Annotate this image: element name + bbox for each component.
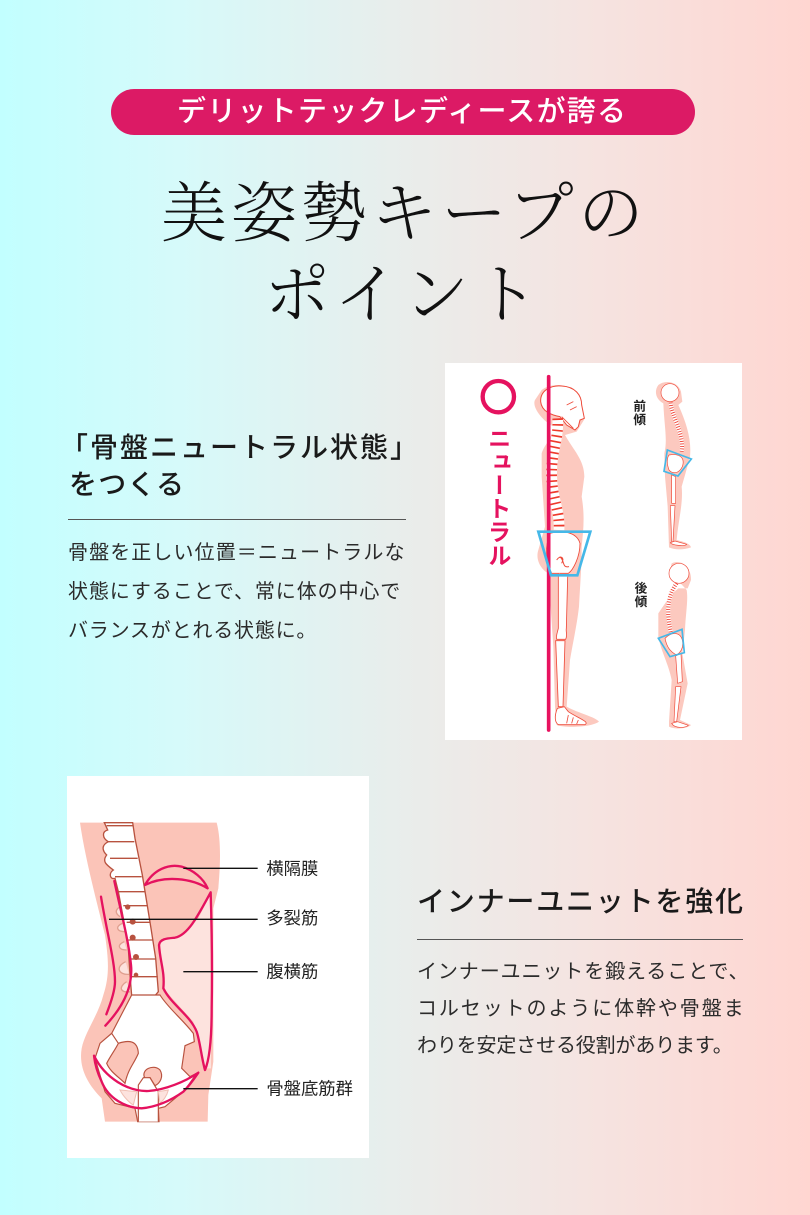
label: posterior tilt: 後 [635,581,648,596]
label: neutral vertical: ニュートラル [485,427,511,567]
pelvis [95,995,197,1122]
title line 2: ポイント [264,259,543,332]
section 2 text [417,886,749,1057]
section 1 body: バランスがとれる状態に。 [68,620,317,642]
banner pill [111,89,695,135]
figure: posterior tilt [658,562,691,728]
pelvis trapezoid [538,532,590,575]
section 2 heading: インナーユニットを強化 [417,886,745,917]
spine [103,823,158,996]
panel: posture diagram [445,363,742,740]
section 1 text [60,432,420,642]
section 1 heading [60,432,420,500]
abdomen fill [160,895,211,1068]
labels: 横隔膜 [266,859,318,879]
figure: neutral skeleton [534,377,599,730]
banner text: デリットテックレディースが誇る [177,96,627,128]
section 2 body [417,961,749,1057]
muscle outlines [94,866,212,1108]
label: anterior tilt: 前 [633,399,646,414]
torso silhouette [80,823,220,1122]
neutral plumb line [543,377,554,730]
figure: anterior tilt [656,382,691,549]
title line 1: 美姿勢キープの [161,178,648,251]
section 1 body: 状態にすることで、常に体の中心で [68,581,401,603]
section 1 body [68,542,406,642]
labels [266,859,353,1098]
leader lines [109,868,258,1089]
section 1 heading: 「骨盤ニュートラル状態」 [60,432,420,463]
labels: 多裂筋 [266,908,318,928]
section 2 body: わりを安定させる役割があります。 [417,1035,733,1057]
icon: circle mark [483,381,514,412]
labels: 骨盤底筋群 [266,1078,353,1098]
section 1 heading: をつくる [69,469,185,500]
panel: posture diagram: 傾 [635,594,648,609]
section 1 body: 骨盤を正しい位置＝ニュートラルな [68,542,406,564]
panel: posture diagram: 傾 [633,412,646,427]
title [161,178,648,332]
section 2 body: コルセットのように体幹や骨盤ま [417,998,746,1020]
labels: 腹横筋 [266,961,318,981]
panel: inner unit diagram [67,776,369,1158]
section 2 body: インナーユニットを鍛えることで、 [417,961,749,983]
